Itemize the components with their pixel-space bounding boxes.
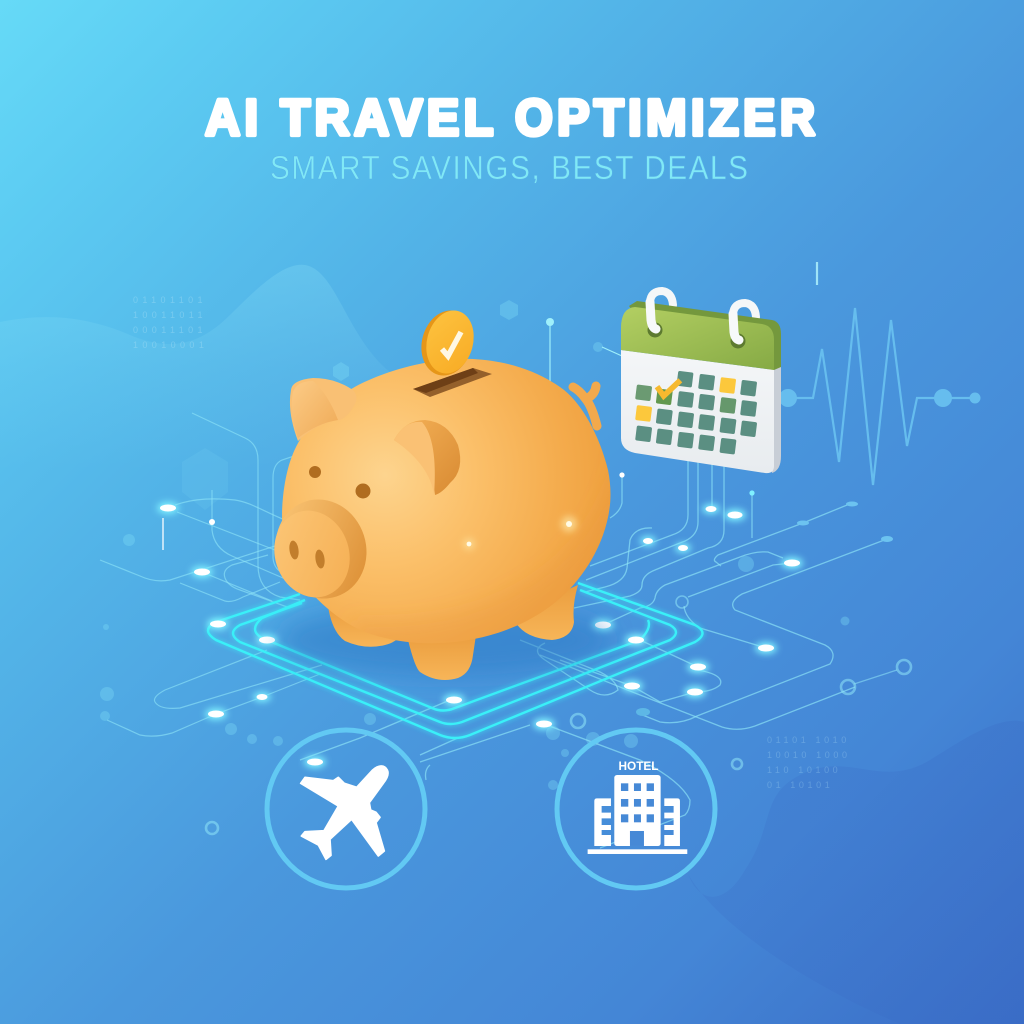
hotel badge ring xyxy=(557,730,715,888)
plane badge ring xyxy=(267,730,425,888)
piggy bank xyxy=(263,305,620,680)
glowing circuit nodes xyxy=(157,318,893,768)
binary text: upper left: 10010001 xyxy=(133,340,208,350)
pig body xyxy=(282,359,610,643)
subtitle: SMART SAVINGS, BEST DEALS xyxy=(270,150,748,186)
hotel badge xyxy=(557,730,715,888)
binary text: upper left: 10011011 xyxy=(133,310,207,320)
title: AI TRAVEL OPTIMIZER xyxy=(205,89,815,146)
calendar rings front xyxy=(648,302,746,348)
binary text: upper left: 00011101 xyxy=(133,325,207,335)
binary text: upper left xyxy=(133,295,208,350)
circuit: neon rounded rhombus traces xyxy=(208,583,702,738)
icon: plane xyxy=(301,766,388,859)
calendar dark header edge xyxy=(629,301,781,370)
pig eyes xyxy=(309,466,321,478)
pig snout xyxy=(263,488,379,610)
icon: hotel building xyxy=(588,775,687,854)
calendar rings back xyxy=(650,291,756,332)
calendar side shadow face xyxy=(764,340,781,473)
calendar xyxy=(621,291,781,473)
binary text: lower right: 10010 1000 xyxy=(767,750,851,760)
binary text: lower right xyxy=(767,735,851,790)
hotel label: HOTEL xyxy=(618,761,658,773)
pig ground shadow xyxy=(280,604,610,676)
circuit: thin lines left xyxy=(100,413,322,736)
pulse line chart xyxy=(779,262,980,485)
calendar date grid xyxy=(635,371,757,455)
pig front leg xyxy=(408,635,476,680)
pig body shading xyxy=(396,550,597,642)
decorative translucent dots xyxy=(100,300,850,790)
binary text: lower right: 110 10100 xyxy=(767,765,841,775)
calendar page xyxy=(621,350,774,473)
pig sparkles xyxy=(463,516,577,550)
circuit: thin lines right xyxy=(300,460,887,848)
binary text: upper left: 01101101 xyxy=(133,295,207,305)
background wave: upper left xyxy=(0,265,470,470)
pig coin xyxy=(414,305,480,381)
binary text: lower right: 01101 1010 xyxy=(767,735,850,745)
binary text: lower right: 01 10101 xyxy=(767,780,833,790)
pig left ear xyxy=(290,378,357,441)
calendar green header xyxy=(621,307,774,370)
pig back-left leg xyxy=(328,606,402,647)
plane badge xyxy=(267,730,425,888)
background wave: lower right xyxy=(688,721,1024,1024)
circuit rings xyxy=(206,596,911,834)
pig coin slot xyxy=(413,368,492,397)
pig back-right leg xyxy=(512,585,578,640)
pig right ear xyxy=(394,420,460,495)
pig tail xyxy=(573,386,597,426)
